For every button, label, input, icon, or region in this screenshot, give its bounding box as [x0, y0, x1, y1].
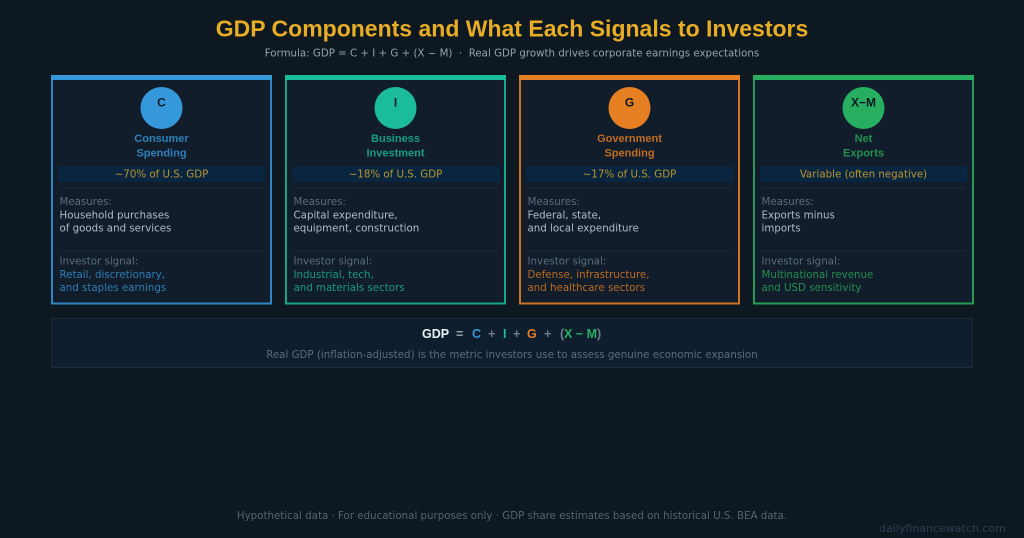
formula: +: [544, 327, 551, 341]
measures: Measures:: [762, 196, 814, 208]
panel heading: Government: [597, 133, 662, 145]
investor signal label: Investor signal:: [762, 256, 840, 268]
measures text: equipment, construction: [294, 222, 419, 234]
investor signal text: Multinational revenue: [762, 269, 873, 281]
panel heading: Consumer: [134, 133, 189, 145]
footer note: Hypothetical data · For educational purposes only · GDP share estimates based on historical U.S. BEA data.: [237, 510, 787, 522]
icon: C circle: [140, 87, 182, 129]
GDP share: ~18% of U.S. GDP: [349, 168, 442, 180]
panel heading: Investment: [366, 148, 425, 160]
panel heading: Spending: [604, 148, 655, 160]
watermark: dailyfinancewatch.com: [879, 522, 1006, 535]
panel: net exports: [753, 75, 974, 304]
panel heading: Spending: [136, 148, 187, 160]
GDP share: [58, 166, 266, 182]
measures text: of goods and services: [60, 222, 171, 234]
GDP share: Variable (often negative): [800, 168, 927, 180]
panel: consumer spending: [51, 75, 272, 304]
measures text: Household purchases: [60, 210, 169, 222]
formula: I: [503, 327, 506, 341]
measures: Measures:: [528, 196, 580, 208]
formula: +: [488, 327, 495, 341]
subtitle: Formula: GDP = C + I + G + (X − M) · Real GDP growth drives corporate earnings expectations: [265, 48, 759, 60]
icon: G circle: G: [625, 96, 634, 110]
panel: government spending: [519, 75, 740, 304]
investor signal text: and materials sectors: [294, 282, 405, 294]
icon: C circle: C: [157, 96, 166, 110]
formula: =: [456, 327, 463, 341]
GDP share: [760, 166, 968, 182]
formula: ): [597, 327, 601, 341]
measures text: Capital expenditure,: [294, 210, 398, 222]
investor signal text: Retail, discretionary,: [60, 269, 165, 281]
GDP share: [526, 166, 734, 182]
investor signal text: and staples earnings: [60, 282, 166, 294]
measures: Measures:: [60, 196, 112, 208]
measures: Measures:: [294, 196, 346, 208]
icon: I circle: [374, 87, 416, 129]
formula: (: [560, 327, 565, 341]
icon: G circle: [608, 87, 650, 129]
panel: business investment: [285, 75, 506, 304]
formula: X − M: [564, 327, 597, 341]
investor signal text: and USD sensitivity: [762, 282, 861, 294]
icon: X-M circle: X−M: [851, 96, 876, 110]
investor signal text: Industrial, tech,: [294, 269, 374, 281]
panel: formula bar: [52, 318, 972, 368]
panel heading: Net: [855, 133, 872, 145]
investor signal text: Defense, infrastructure,: [528, 269, 650, 281]
panel heading: Exports: [843, 148, 884, 160]
icon: I circle: I: [394, 96, 397, 110]
measures text: Federal, state,: [528, 210, 601, 222]
formula: C: [472, 327, 481, 341]
GDP share: ~70% of U.S. GDP: [115, 168, 208, 180]
formula: GDP: [422, 327, 449, 341]
title: GDP Components and What Each Signals to Investors: [216, 16, 808, 42]
formula note: Real GDP (inflation-adjusted) is the metric investors use to assess genuine economic expansion: [266, 349, 758, 361]
measures text: Exports minus: [762, 210, 835, 222]
formula: +: [513, 327, 520, 341]
GDP share: [292, 166, 500, 182]
investor signal label: Investor signal:: [528, 256, 606, 268]
measures text: and local expenditure: [528, 222, 639, 234]
measures text: imports: [762, 222, 801, 234]
investor signal label: Investor signal:: [60, 256, 138, 268]
GDP share: ~17% of U.S. GDP: [583, 168, 676, 180]
investor signal text: and healthcare sectors: [528, 282, 645, 294]
formula: G: [527, 327, 537, 341]
panel heading: Business: [371, 133, 420, 145]
icon: X-M circle: [842, 87, 884, 129]
investor signal label: Investor signal:: [294, 256, 372, 268]
